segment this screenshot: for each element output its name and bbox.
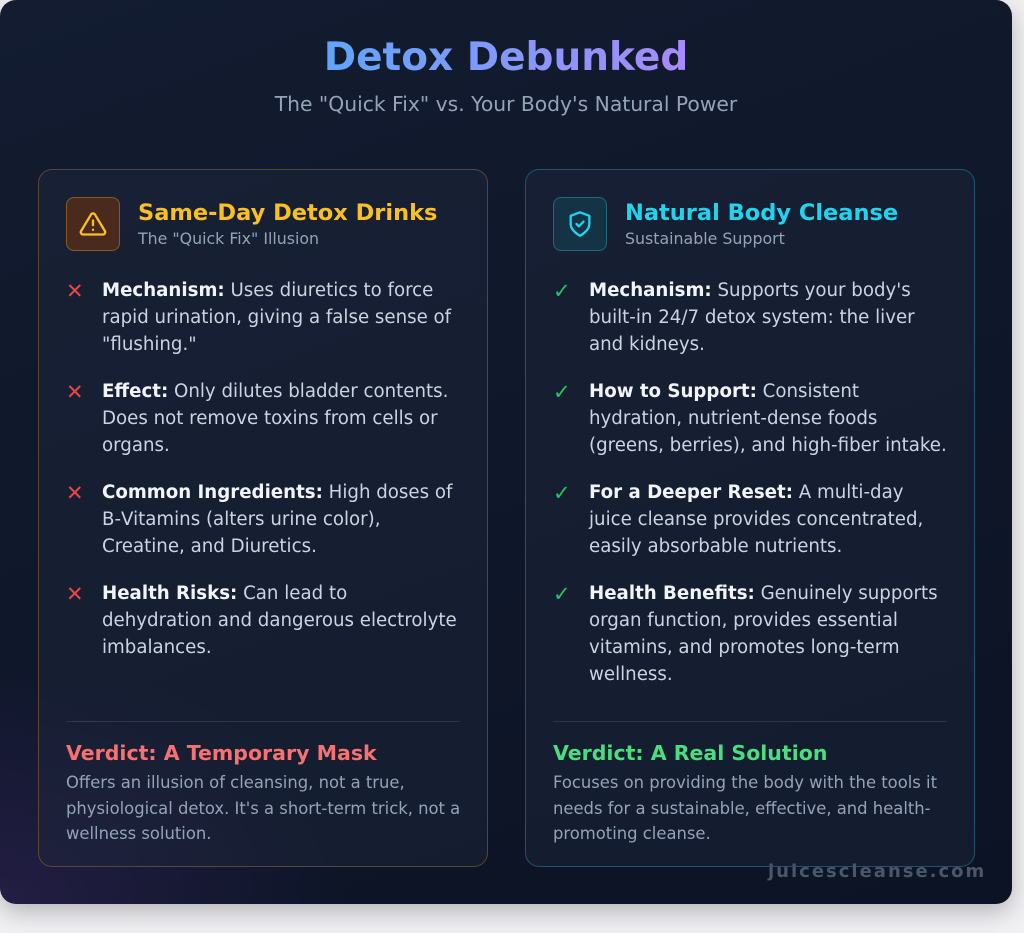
list: natural support: Health Benefits: Genuinely supports organ function, provides essential vitamins, and promotes long-term wellness. xyxy=(589,583,938,685)
list: drink claims xyxy=(66,279,457,658)
list: drink claims: Common Ingredients: High doses of B‑Vitamins (alters urine color), Creatine, and Diuretics. xyxy=(102,482,452,557)
list: natural support: juice cleanse provides concentrated, easily absorbable nutrients. xyxy=(589,509,923,557)
icon: warning xyxy=(66,197,120,251)
list: natural support: How to Support: Consistent hydration, nutrient-dense foods (greens, berries), and high-fiber intake. xyxy=(589,381,947,456)
list: drink claims: ✕ xyxy=(66,582,84,606)
list: drink claims: dehydration and dangerous electrolyte imbalances. xyxy=(102,610,457,658)
verdict text: Focuses on providing the body with the tools it needs for a sustainable, effective, and health-promoting cleanse. xyxy=(553,773,937,843)
list: natural support: ✓ xyxy=(553,380,571,404)
list: drink claims: Health Risks: Can lead to xyxy=(102,583,347,604)
verdict heading: Verdict: A Temporary Mask xyxy=(66,741,377,765)
list: natural support: ✓ xyxy=(553,481,571,505)
subheading: The "Quick Fix" Illusion xyxy=(138,229,319,248)
icon: shield check xyxy=(553,197,607,251)
verdict text: Offers an illusion of cleansing, not a true, physiological detox. It's a short-term trick, not a wellness solution. xyxy=(66,773,460,843)
list: drink claims: ✕ xyxy=(66,279,84,303)
subtitle: The "Quick Fix" vs. Your Body's Natural Power xyxy=(275,92,737,116)
list: natural support: Mechanism: Supports your body's built-in 24/7 detox system: the liver and kidneys. xyxy=(589,280,915,355)
list: drink claims: Mechanism: Uses diuretics to force rapid urination, giving a false sense of "flushing." xyxy=(102,280,451,355)
list: drink claims: ✕ xyxy=(66,481,84,505)
list: natural support: ✓ xyxy=(553,279,571,303)
heading: Natural Body Cleanse xyxy=(625,200,898,226)
subheading: Sustainable Support xyxy=(625,229,785,248)
heading: Same-Day Detox Drinks xyxy=(138,200,437,226)
list: drink claims: Effect: Only dilutes bladder contents. Does not remove toxins from cells or organs. xyxy=(102,381,448,456)
panel: same-day detox drinks xyxy=(38,169,488,867)
title: Detox Debunked xyxy=(324,35,688,80)
watermark: juicescleanse.com xyxy=(768,861,986,882)
verdict heading: Verdict: A Real Solution xyxy=(553,741,827,765)
list: natural support: ✓ xyxy=(553,582,571,606)
list: natural support xyxy=(553,279,947,685)
list: natural support: For a Deeper Reset: A multi-day xyxy=(589,482,904,503)
panel: natural body cleanse xyxy=(525,169,975,867)
list: drink claims: ✕ xyxy=(66,380,84,404)
